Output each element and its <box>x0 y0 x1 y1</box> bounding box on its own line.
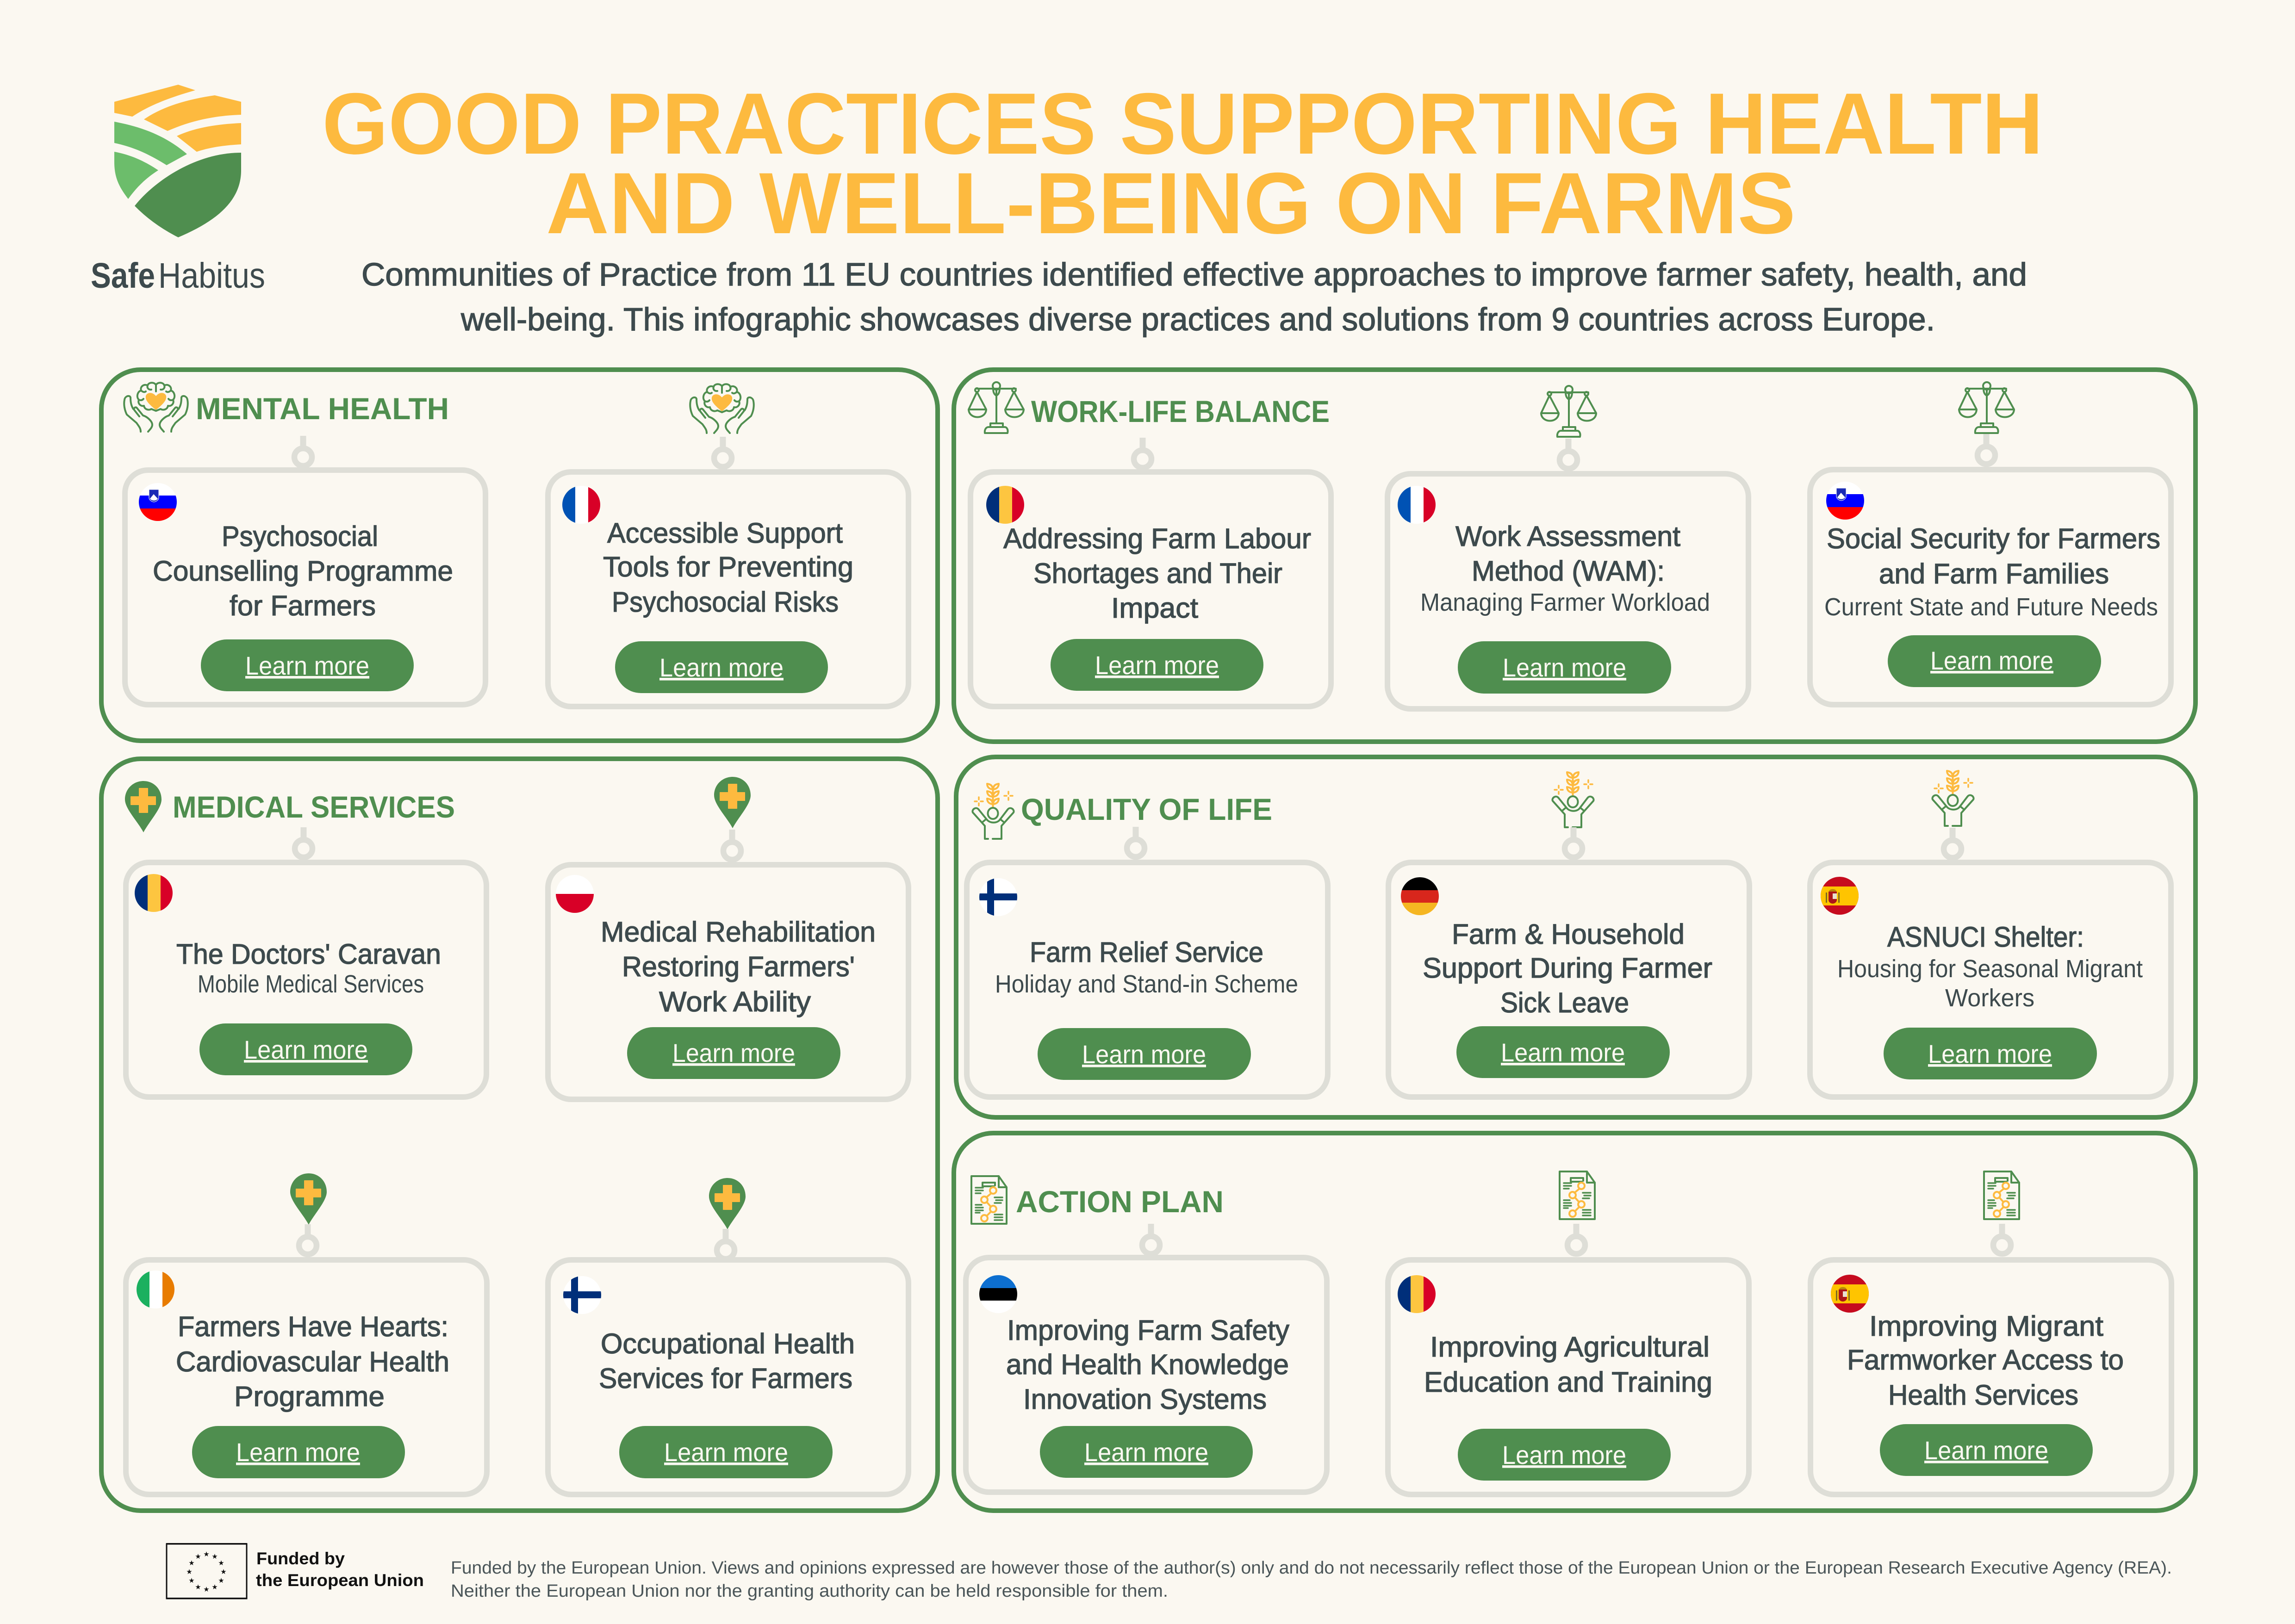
card: psychosocial counselling <box>125 470 485 705</box>
flag: Finland <box>563 1276 601 1314</box>
button: learn more: Learn more <box>1930 646 2053 675</box>
card: work assessment method <box>1387 474 1748 709</box>
card title <box>995 936 1298 998</box>
card title: Tools for Preventing <box>603 551 853 583</box>
panel frame <box>101 759 938 1511</box>
card title: Sick Leave <box>1500 987 1629 1018</box>
flag: Ireland <box>137 1271 174 1308</box>
card title <box>1424 1331 1712 1398</box>
logo shield <box>114 85 241 237</box>
card title: Current State and Future Needs <box>1824 593 2158 621</box>
icon: scales <box>1959 382 2014 433</box>
connector <box>714 437 732 467</box>
flag: Slovenia <box>139 483 177 521</box>
connector <box>1978 434 1995 464</box>
subtitle: Communities of Practice from 11 EU countries identified effective approaches to improve farmer safety, health, and <box>361 256 2027 292</box>
card title: Support During Farmer <box>1423 952 1712 984</box>
card title: Cardiovascular Health <box>176 1346 449 1377</box>
connector <box>1993 1224 2011 1254</box>
logo: SafeHabitus <box>91 85 265 296</box>
button: learn more <box>1884 1028 2097 1079</box>
card title: Addressing Farm Labour <box>1003 523 1311 554</box>
heading: quality of life: QUALITY OF LIFE <box>1021 792 1272 826</box>
card title: Occupational Health <box>601 1328 855 1359</box>
card title: Medical Rehabilitation <box>601 916 876 948</box>
card: social security <box>1810 470 2171 705</box>
card title <box>601 916 876 1017</box>
card title <box>1837 921 2143 1012</box>
EU flag box: ★ <box>188 1559 195 1567</box>
EU flag box: ★ <box>218 1577 224 1585</box>
panel frame <box>956 757 2195 1117</box>
connector <box>1565 827 1582 857</box>
card title <box>1824 523 2160 621</box>
card title <box>176 1311 449 1412</box>
card title: Impact <box>1111 592 1198 624</box>
flag: Germany <box>1401 877 1439 915</box>
button: learn more: Learn more <box>664 1438 788 1467</box>
heading: mental health: MENTAL HEALTH <box>196 391 449 426</box>
icon: brain and hands <box>690 384 754 433</box>
card title: Innovation Systems <box>1023 1383 1267 1415</box>
connector <box>1567 1224 1585 1254</box>
button: learn more <box>1880 1424 2093 1476</box>
EU flag box: ★ <box>188 1577 195 1585</box>
card title: Accessible Support <box>607 517 843 549</box>
panel frame <box>954 370 2195 742</box>
icon: brain and hands <box>124 383 188 432</box>
card title: Improving Farm Safety <box>1007 1314 1289 1346</box>
icon: person with wheat <box>1552 772 1594 827</box>
card title: Managing Farmer Workload <box>1420 589 1710 616</box>
card: the doctors' caravan <box>126 862 486 1097</box>
flag: Spain <box>1821 877 1859 915</box>
flag: France <box>562 486 600 524</box>
panel: work-life balance <box>954 370 2195 742</box>
icon: medical pin <box>714 777 751 828</box>
footer: disclaimer: Neither the European Union nor the granting authority can be held responsible for them. <box>451 1581 1168 1601</box>
card title: Restoring Farmers' <box>622 951 855 982</box>
icon: medical pin <box>290 1173 327 1225</box>
connector <box>1127 827 1144 857</box>
card: accessible support tools <box>548 472 908 707</box>
card title: Workers <box>1945 984 2034 1012</box>
connector <box>1560 439 1577 469</box>
title <box>322 75 2043 252</box>
card title <box>1420 521 1710 616</box>
footer: EU funding emblem <box>166 1543 424 1599</box>
button: learn more <box>1888 635 2101 687</box>
heading: medical services: MEDICAL SERVICES <box>173 790 455 824</box>
card title: Psychosocial <box>222 521 378 552</box>
card title: Work Assessment <box>1455 521 1680 552</box>
logo wordmark <box>91 256 265 296</box>
card title: Shortages and Their <box>1033 558 1282 589</box>
button: learn more <box>615 641 828 693</box>
button: learn more: Learn more <box>236 1438 360 1467</box>
button: learn more <box>199 1023 412 1075</box>
flag: Romania <box>986 486 1024 524</box>
icon: action plan document <box>1560 1172 1595 1219</box>
card title: Improving Agricultural <box>1430 1331 1710 1363</box>
icon: scales <box>969 382 1024 433</box>
button: learn more <box>1458 1429 1671 1481</box>
panel: quality of life <box>956 757 2195 1117</box>
card: farm and household support <box>1388 862 1749 1097</box>
panel: medical services <box>101 759 938 1511</box>
footer: disclaimer <box>451 1558 2172 1601</box>
button: learn more: Learn more <box>1084 1438 1208 1467</box>
flag: Estonia <box>979 1275 1017 1313</box>
button: learn more <box>201 639 414 691</box>
card title: Housing for Seasonal Migrant <box>1837 955 2143 983</box>
card title: and Farm Families <box>1879 558 2109 589</box>
flag: Finland <box>979 878 1017 916</box>
EU flag box: ★ <box>203 1586 210 1593</box>
card title: Method (WAM): <box>1472 555 1665 587</box>
connector <box>295 827 312 857</box>
icon: person with wheat <box>1932 771 1974 826</box>
card title <box>599 1328 855 1394</box>
connector <box>723 830 741 860</box>
card title <box>1847 1310 2124 1411</box>
connector <box>294 436 312 466</box>
card title: Services for Farmers <box>599 1363 852 1394</box>
EU flag box <box>166 1543 247 1599</box>
card title: Farm Relief Service <box>1030 936 1263 968</box>
button: learn more <box>1456 1026 1670 1078</box>
card title <box>1006 1314 1289 1415</box>
connector <box>717 1229 734 1259</box>
button: learn more <box>619 1426 833 1478</box>
icon: person with wheat <box>972 784 1014 839</box>
button: learn more <box>1051 639 1263 691</box>
card: occupational health <box>548 1260 908 1494</box>
card: migrant farmworker access <box>1810 1260 2171 1494</box>
card title <box>1003 523 1311 624</box>
icon: action plan document <box>1984 1172 2019 1219</box>
panel: mental health <box>101 370 938 741</box>
flag: Romania <box>135 874 173 912</box>
button: learn more: Learn more <box>1095 651 1219 680</box>
footer: disclaimer: Funded by the European Union. Views and opinions expressed are however those of the author(s) only and do not necessarily reflect those of the European Union or the European Research Executive Agency (REA). <box>451 1558 2172 1578</box>
card title: Mobile Medical Services <box>198 970 424 998</box>
logo wordmark: Safe <box>91 256 155 296</box>
card title: Programme <box>234 1381 385 1412</box>
card title: Social Security for Farmers <box>1827 523 2160 554</box>
button: learn more: Learn more <box>1501 1038 1625 1067</box>
card title <box>153 521 453 621</box>
card title: Work Ability <box>659 986 811 1017</box>
title: AND WELL-BEING ON FARMS <box>546 155 1796 252</box>
EU flag box: ★ <box>218 1559 224 1567</box>
EU flag box: ★ <box>220 1568 227 1576</box>
flag: Poland <box>556 875 594 913</box>
card title: Health Services <box>1888 1379 2078 1411</box>
card title: Farm & Household <box>1452 918 1685 950</box>
funded by text <box>256 1549 424 1590</box>
card: farm relief service <box>967 862 1328 1097</box>
panel: action plan <box>954 1133 2195 1511</box>
card: farm safety knowledge systems <box>966 1258 1327 1492</box>
connector <box>1134 438 1151 468</box>
icon: action plan document <box>971 1176 1007 1224</box>
flag: Romania <box>1398 1275 1436 1313</box>
funded by text: Funded by <box>256 1549 345 1568</box>
button: learn more: Learn more <box>1503 653 1626 682</box>
card: agricultural education <box>1388 1260 1749 1494</box>
card title: Psychosocial Risks <box>612 586 839 618</box>
EU flag box: ★ <box>195 1553 201 1561</box>
icon: medical pin <box>125 781 162 832</box>
EU flag box: ★ <box>195 1583 201 1591</box>
button: learn more: Learn more <box>245 651 369 680</box>
connector <box>1944 828 1961 858</box>
flag: Spain <box>1831 1275 1869 1313</box>
card title: Farmworker Access to <box>1847 1344 2124 1376</box>
button: learn more: Learn more <box>1082 1040 1206 1069</box>
card title <box>1423 918 1712 1018</box>
card title: and Health Knowledge <box>1006 1349 1289 1380</box>
card title: Improving Migrant <box>1869 1310 2103 1342</box>
heading: action plan: ACTION PLAN <box>1016 1184 1224 1219</box>
connector <box>1142 1224 1160 1254</box>
connector <box>299 1224 317 1254</box>
card title <box>603 517 853 618</box>
card: farmers have hearts <box>126 1260 487 1494</box>
logo wordmark: Habitus <box>158 256 265 296</box>
card: medical rehabilitation <box>548 865 908 1099</box>
card title: The Doctors' Caravan <box>176 938 441 970</box>
button: learn more <box>1038 1028 1251 1080</box>
card title: ASNUCI Shelter: <box>1887 921 2084 953</box>
button: learn more: Learn more <box>1502 1440 1626 1469</box>
button: learn more: Learn more <box>1928 1039 2052 1068</box>
card title: Farmers Have Hearts: <box>178 1311 448 1342</box>
EU flag box: ★ <box>203 1550 210 1558</box>
button: learn more: Learn more <box>1924 1436 2048 1465</box>
button: learn more <box>627 1027 840 1079</box>
icon: medical pin <box>709 1178 746 1229</box>
card: ASNUCI shelter <box>1810 862 2171 1097</box>
card: farm labour shortages <box>970 472 1331 707</box>
card title: for Farmers <box>230 590 376 621</box>
card title <box>176 938 441 998</box>
subtitle: well-being. This infographic showcases diverse practices and solutions from 9 countries across Europe. <box>460 301 1935 337</box>
panel frame <box>954 1133 2195 1511</box>
button: learn more <box>1458 641 1671 694</box>
EU flag box: ★ <box>186 1568 193 1576</box>
EU flag box: ★ <box>211 1553 218 1561</box>
subtitle <box>361 256 2027 337</box>
panel frame <box>101 370 938 741</box>
button: learn more: Learn more <box>659 653 784 682</box>
card title: Education and Training <box>1424 1366 1712 1398</box>
EU flag box: ★ <box>211 1583 218 1591</box>
button: learn more: Learn more <box>672 1038 795 1067</box>
flag: France <box>1398 486 1436 524</box>
button: learn more: Learn more <box>244 1035 368 1064</box>
title: GOOD PRACTICES SUPPORTING HEALTH <box>322 75 2043 172</box>
button: learn more <box>1040 1426 1253 1478</box>
icon: scales <box>1541 386 1596 437</box>
heading: work-life balance: WORK-LIFE BALANCE <box>1031 394 1330 428</box>
funded by text: the European Union <box>256 1571 424 1590</box>
card title: Counselling Programme <box>153 555 453 587</box>
card title: Holiday and Stand-in Scheme <box>995 970 1298 998</box>
flag: Slovenia <box>1826 482 1864 520</box>
button: learn more <box>192 1426 405 1478</box>
